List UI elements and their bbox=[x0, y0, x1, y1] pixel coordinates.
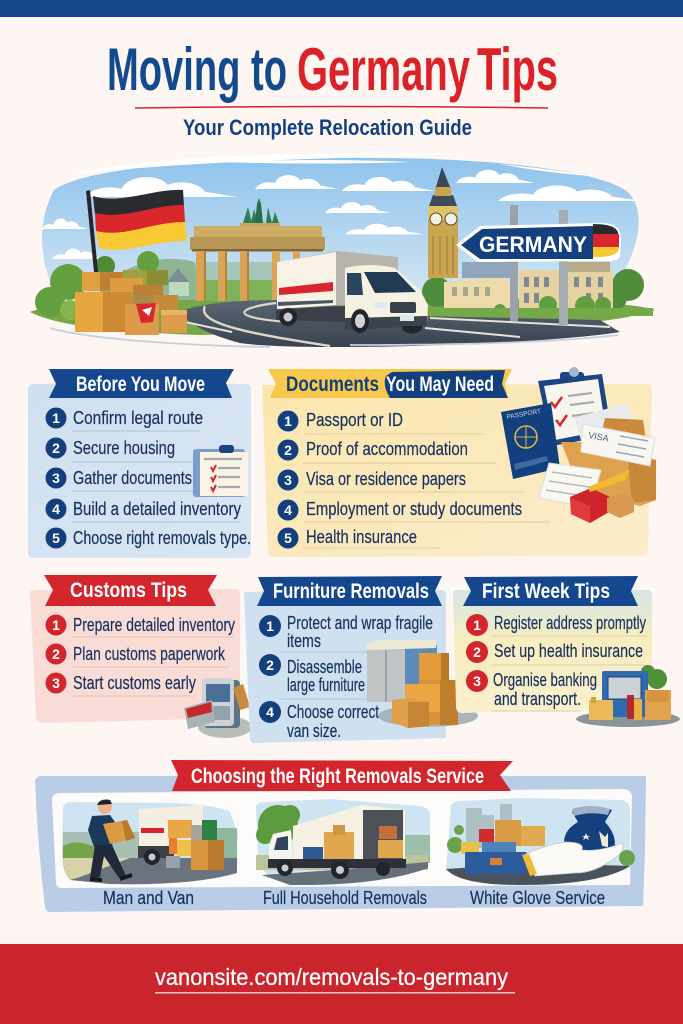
title: Tips bbox=[477, 36, 558, 103]
list: customs: 1 bbox=[52, 617, 60, 633]
bushes bbox=[494, 296, 611, 316]
list: documents: Employment or study documents bbox=[306, 498, 522, 519]
list: documents: 5 bbox=[284, 530, 292, 546]
dividers bbox=[281, 652, 372, 699]
dividers bbox=[72, 637, 234, 696]
list: before you move: 4 bbox=[52, 501, 60, 517]
footer url: vanonsite.com/removals-to-germany bbox=[155, 964, 508, 990]
ribbon: documents you may need: You May Need bbox=[386, 373, 494, 396]
list: before you move: Build a detailed inventory bbox=[73, 498, 242, 519]
list: documents bbox=[278, 409, 522, 548]
ribbon: furniture removals bbox=[257, 576, 442, 606]
dividers bbox=[72, 431, 240, 522]
list: before you move: 2 bbox=[52, 440, 60, 456]
panel: documents you may need bbox=[262, 367, 656, 557]
white sky streaks bbox=[70, 153, 590, 176]
panel: choosing the right removals service bbox=[35, 760, 646, 912]
paper bbox=[539, 463, 601, 508]
truck body bbox=[293, 805, 405, 859]
list: customs: Start customs early bbox=[73, 672, 197, 693]
service labels bbox=[103, 887, 605, 908]
small box bbox=[607, 493, 634, 518]
illustration: bank machine and boxes bbox=[576, 665, 680, 727]
list: documents: Visa or residence papers bbox=[306, 468, 466, 489]
road bbox=[50, 300, 620, 347]
title: Germany bbox=[297, 36, 470, 103]
list: before you move: 5 bbox=[52, 530, 60, 546]
quadriga bbox=[243, 198, 279, 223]
blue vase bbox=[564, 806, 615, 860]
title bbox=[107, 36, 558, 103]
boxes in truck bbox=[303, 825, 403, 859]
Brandenburg Gate bbox=[190, 198, 325, 301]
list: first week: 1 bbox=[473, 617, 481, 633]
pen bbox=[588, 470, 630, 492]
list: before you move: Secure housing bbox=[73, 437, 175, 458]
list: first week: Organise banking bbox=[493, 669, 597, 690]
url underline bbox=[155, 992, 515, 994]
title: Moving to bbox=[107, 36, 287, 103]
illustration: documents bundle bbox=[501, 367, 656, 523]
list: furniture: Choose correct bbox=[287, 701, 379, 722]
list: customs: 3 bbox=[52, 675, 60, 691]
list: customs: 2 bbox=[52, 646, 60, 662]
list: customs: Prepare detailed inventory bbox=[73, 614, 236, 635]
ribbon: before you move: Before You Move bbox=[76, 373, 205, 396]
list: first week: 3 bbox=[473, 673, 481, 689]
ribbon: before you move bbox=[49, 369, 234, 398]
list: first week: and transport. bbox=[494, 688, 581, 709]
panel: before you move bbox=[28, 369, 251, 558]
list: before you move: 3 bbox=[52, 470, 60, 486]
list: furniture: items bbox=[287, 630, 321, 651]
top navy band bbox=[0, 0, 683, 17]
list: documents: 3 bbox=[284, 472, 292, 488]
service labels: White Glove Service bbox=[470, 887, 605, 908]
visa paper: VISA bbox=[588, 430, 610, 444]
passport bbox=[501, 403, 560, 479]
ribbon: customs tips bbox=[44, 575, 217, 606]
orange folder back bbox=[600, 418, 646, 440]
list: customs bbox=[46, 614, 236, 694]
ribbon: choosing the right removals service bbox=[171, 760, 513, 791]
truck bbox=[138, 805, 203, 865]
list: documents: 4 bbox=[284, 502, 292, 518]
box body bbox=[561, 442, 656, 506]
list: before you move: Choose right removals type. bbox=[73, 527, 251, 548]
list: furniture: 2 bbox=[266, 657, 274, 673]
list: documents: Proof of accommodation bbox=[306, 438, 468, 459]
service labels: Man and Van bbox=[103, 887, 194, 908]
list: documents: 1 bbox=[284, 413, 292, 429]
left trees bbox=[35, 251, 159, 320]
list: before you move: 1 bbox=[52, 410, 60, 426]
goods bbox=[461, 820, 545, 874]
list: before you move: Confirm legal route bbox=[73, 407, 203, 428]
left cream building bbox=[444, 272, 512, 312]
list: first week bbox=[466, 612, 647, 709]
ribbon: first week tips: First Week Tips bbox=[482, 580, 610, 603]
clouds bbox=[42, 170, 643, 259]
list: documents: 2 bbox=[284, 442, 292, 458]
list: furniture: Protect and wrap fragile bbox=[287, 612, 433, 633]
list: documents: Health insurance bbox=[306, 526, 417, 547]
hero scene bbox=[30, 153, 655, 347]
panel: furniture removals bbox=[244, 576, 478, 743]
list: furniture bbox=[259, 612, 433, 741]
visa paper bbox=[581, 424, 655, 466]
subtitle: Your Complete Relocation Guide bbox=[183, 115, 472, 140]
ribbon: documents you may need: Documents bbox=[286, 373, 379, 396]
white picture strip bbox=[52, 789, 632, 888]
dividers bbox=[303, 434, 550, 548]
German flag and pole bbox=[86, 190, 187, 272]
red box bbox=[570, 488, 610, 523]
list: furniture: van size. bbox=[287, 720, 341, 741]
ribbon: choosing the right removals service: Choosing the Right Removals Service bbox=[191, 765, 484, 788]
sky bbox=[42, 158, 639, 300]
ground bbox=[30, 297, 655, 335]
service labels: Full Household Removals bbox=[263, 887, 427, 908]
cardboard box pile bbox=[75, 270, 187, 335]
list: furniture: 4 bbox=[266, 704, 274, 720]
list: before you move: Gather documents bbox=[73, 467, 192, 488]
mover bbox=[88, 800, 135, 880]
removal truck bbox=[276, 251, 428, 334]
list: before you move bbox=[46, 407, 251, 548]
Germany road sign bbox=[456, 205, 621, 325]
title underline bbox=[135, 106, 548, 108]
right cream building bbox=[519, 262, 613, 308]
icon: clipboard checklist bbox=[193, 445, 248, 497]
picture: full household removals bbox=[256, 799, 430, 885]
footer band bbox=[0, 944, 683, 1024]
distant house bbox=[166, 268, 190, 296]
panel: first week tips bbox=[453, 576, 680, 727]
list: furniture: 1 bbox=[266, 618, 274, 634]
right trees and buildings bbox=[422, 167, 653, 316]
Big Ben clock tower bbox=[428, 167, 458, 278]
list: first week: 2 bbox=[473, 644, 481, 660]
cargo boxes bbox=[166, 820, 224, 870]
ribbon: first week tips bbox=[463, 576, 638, 606]
list: first week: Set up health insurance bbox=[494, 640, 643, 661]
ribbon: furniture removals: Furniture Removals bbox=[273, 580, 429, 603]
list: furniture: large furniture bbox=[287, 674, 365, 695]
passport: PASSPORT bbox=[506, 408, 542, 421]
illustration: customs scanner bbox=[184, 678, 252, 738]
list: documents: Passport or ID bbox=[306, 409, 403, 430]
panel: customs tips bbox=[30, 575, 252, 738]
picture: man and van bbox=[62, 800, 238, 884]
white glove bbox=[522, 842, 623, 876]
background hills and trees bbox=[100, 259, 278, 301]
dividers bbox=[491, 636, 648, 711]
list: furniture: Disassemble bbox=[287, 656, 362, 677]
ribbon: documents you may need bbox=[268, 369, 512, 398]
picture: white glove service bbox=[446, 798, 635, 885]
ribbon: customs tips: Customs Tips bbox=[70, 579, 187, 602]
list: customs: Plan customs paperwork bbox=[73, 643, 226, 664]
sign text: GERMANY bbox=[479, 232, 587, 257]
illustration: wrapped furniture and boxes bbox=[366, 640, 478, 728]
clipboard bbox=[538, 367, 612, 446]
